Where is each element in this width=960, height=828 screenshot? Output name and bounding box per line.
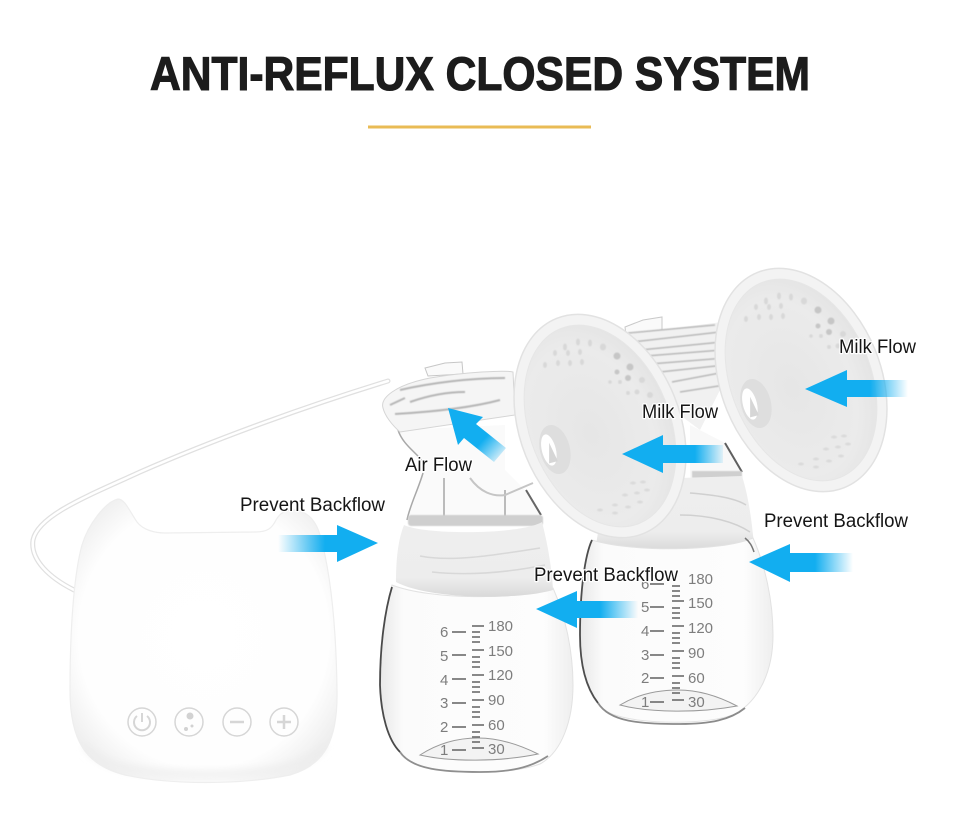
front shield centre opening — [534, 422, 576, 477]
front shield lower vents — [597, 480, 650, 514]
rear bottle lid — [620, 317, 735, 430]
icon: power button — [128, 708, 156, 736]
front bottle scale: 180 — [488, 618, 513, 635]
front bottle scale: 60 — [488, 717, 505, 734]
icon: mode button — [175, 708, 203, 736]
title: ANTI-REFLUX CLOSED SYSTEM — [150, 47, 810, 100]
front bottle scale: 30 — [488, 741, 505, 758]
rear bottle scale: 4 — [641, 623, 649, 640]
front bottle scale: 120 — [488, 667, 513, 684]
gold divider under title — [368, 126, 591, 128]
rear bottle scale: 6 — [641, 576, 649, 593]
label: air flow: Air Flow — [405, 455, 472, 476]
front bottle lid — [383, 362, 515, 432]
rear bottle scale: 90 — [688, 645, 705, 662]
rear bottle scale: 120 — [688, 620, 713, 637]
label: prevent backflow left: Prevent Backflow — [240, 495, 385, 516]
arrow: milk flow rear — [805, 370, 908, 407]
front bottle collar — [396, 522, 553, 597]
label: prevent backflow centre: Prevent Backflow — [534, 565, 678, 586]
front shield upper vents — [543, 338, 653, 398]
air tube — [33, 381, 388, 590]
rear bottle scale: 5 — [641, 599, 649, 616]
arrow: air flow — [448, 408, 506, 462]
icon: plus button — [270, 708, 298, 736]
label: milk flow front: Milk Flow — [642, 402, 718, 423]
front bottle body — [380, 585, 573, 772]
rear shield upper vents — [744, 292, 854, 352]
label: prevent backflow right: Prevent Backflow — [764, 511, 908, 532]
rear bottle collar — [596, 476, 754, 550]
rear shield centre opening — [735, 376, 777, 431]
arrow: prevent backflow front bottle — [536, 591, 638, 628]
front bottle scale: 90 — [488, 692, 505, 709]
front bottle scale: 5 — [440, 648, 448, 665]
label: milk flow rear: Milk Flow — [839, 337, 916, 358]
rear bottle scale: 3 — [641, 647, 649, 664]
front bottle scale: 6 — [440, 624, 448, 641]
rear bottle scale: 1 — [641, 694, 649, 711]
front bottle scale: 1 — [440, 742, 448, 759]
front bottle scale: 2 — [440, 719, 448, 736]
front bottle scale: 3 — [440, 695, 448, 712]
front bottle assembly — [380, 362, 573, 772]
front bottle scale — [440, 618, 513, 759]
arrow: milk flow front — [622, 435, 723, 473]
pump control unit — [70, 499, 337, 782]
rear bottle body — [580, 538, 773, 724]
rear breast shield — [683, 242, 919, 518]
rear bottle scale: 30 — [688, 694, 705, 711]
rear bottle scale: 180 — [688, 571, 713, 588]
front bottle scale: 150 — [488, 643, 513, 660]
rear bottle assembly — [580, 317, 773, 724]
rear bottle scale — [641, 571, 713, 711]
front breast shield — [482, 288, 718, 564]
front bottle scale: 4 — [440, 672, 448, 689]
rear bottle neck — [690, 425, 742, 478]
rear shield lower vents — [798, 434, 851, 468]
arrow: prevent backflow into pump unit — [278, 525, 378, 562]
rear bottle scale: 2 — [641, 670, 649, 687]
rear bottle scale: 60 — [688, 670, 705, 687]
front bottle neck — [398, 425, 543, 526]
arrow: prevent backflow rear bottle — [749, 544, 853, 582]
icon: minus button — [223, 708, 251, 736]
rear bottle scale: 150 — [688, 595, 713, 612]
